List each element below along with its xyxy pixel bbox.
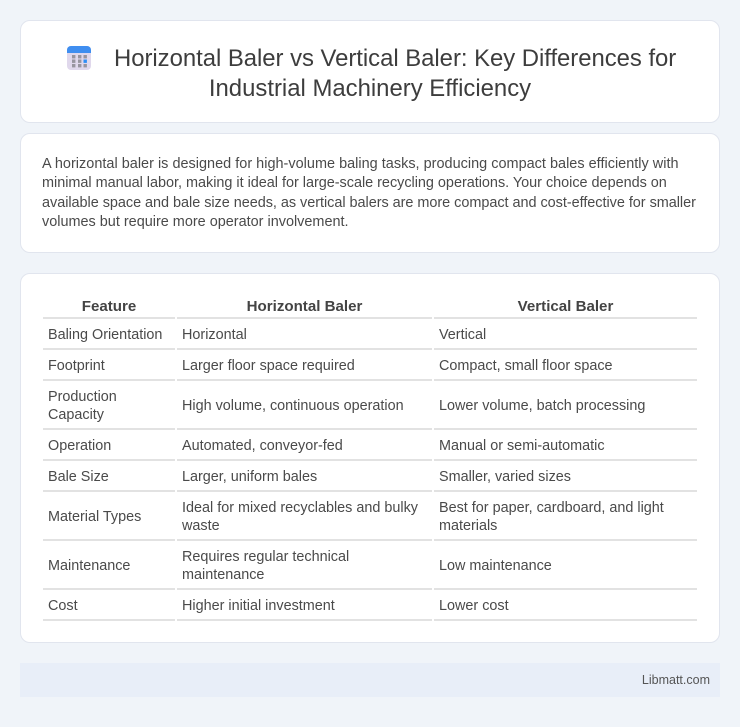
row: bale size: Bale Size: [48, 469, 109, 485]
row: production capacity: Capacity: [48, 407, 104, 423]
row: footprint: Footprint: [48, 358, 105, 374]
row: baling orientation: Baling Orientation: [48, 327, 162, 343]
heading: vertical baler: Vertical Baler: [518, 298, 613, 315]
panel: comparison table: Smaller, varied sizes: [439, 469, 571, 485]
text block: intro: available space and bale size needs, as vertical balers are more compact and cost-effective for smaller: [42, 195, 696, 211]
panel: comparison table: Compact, small floor space: [439, 358, 613, 374]
footer text: Libmatt.com: [642, 673, 710, 687]
heading: feature: Feature: [82, 298, 136, 315]
row: cost: Cost: [48, 598, 78, 614]
panel: comparison table: Ideal for mixed recyclables and bulky: [182, 500, 418, 516]
text block: intro: A horizontal baler is designed for high-volume baling tasks, producing compact bales efficiently with: [42, 156, 679, 172]
title: Horizontal Baler vs Vertical Baler: Key Differences for: [114, 45, 676, 72]
icon: calendar: [67, 46, 91, 70]
panel: comparison table: maintenance: [182, 567, 264, 583]
panel: comparison table: Higher initial investment: [182, 598, 335, 614]
row: production capacity: [48, 389, 117, 423]
panel: comparison table: Automated, conveyor-fed: [182, 438, 343, 454]
row: production capacity: Production: [48, 389, 117, 405]
row: material types: Material Types: [48, 509, 141, 525]
panel: comparison table: Low maintenance: [439, 558, 552, 574]
panel: intro text: [20, 133, 720, 253]
title: [114, 45, 676, 102]
panel: comparison table: Requires regular technical: [182, 549, 349, 565]
panel: comparison table: High volume, continuous operation: [182, 398, 404, 414]
panel: comparison table: Horizontal: [182, 327, 247, 343]
row: maintenance: Maintenance: [48, 558, 130, 574]
table header: [82, 298, 614, 315]
panel: comparison table: [20, 273, 720, 643]
row: operation: Operation: [48, 438, 111, 454]
panel: comparison table: materials: [439, 518, 497, 534]
text block: intro: [42, 156, 696, 230]
panel: comparison table: Manual or semi-automatic: [439, 438, 605, 454]
panel: comparison table: Larger floor space required: [182, 358, 355, 374]
footer bar: [20, 663, 720, 697]
heading: horizontal baler: Horizontal Baler: [247, 298, 362, 315]
title: Industrial Machinery Efficiency: [209, 75, 531, 102]
panel: comparison table: Lower volume, batch processing: [439, 398, 645, 414]
text block: intro: minimal manual labor, making it ideal for large-scale recycling operations. Your choice depends on: [42, 175, 667, 191]
panel: comparison table: waste: [182, 518, 220, 534]
panel: comparison table: Larger, uniform bales: [182, 469, 317, 485]
panel: comparison table: Best for paper, cardboard, and light: [439, 500, 664, 516]
panel: comparison table: Lower cost: [439, 598, 509, 614]
panel: comparison table: Vertical: [439, 327, 486, 343]
panel: title card: [20, 20, 720, 123]
text block: intro: volumes but require more operator involvement.: [42, 214, 349, 230]
